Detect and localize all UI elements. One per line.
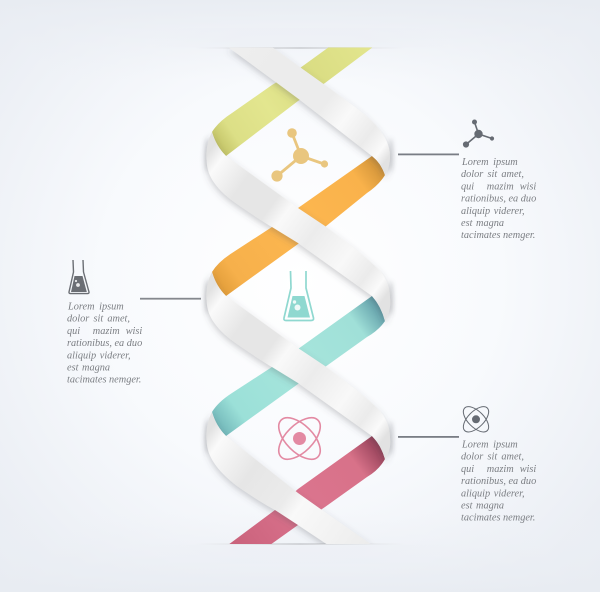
icon: grey molecule	[463, 120, 494, 148]
text block: bottom right: Lorem ipsum	[461, 440, 518, 450]
text block: bottom right: rationibus, ea duo	[461, 476, 536, 487]
bottom sheet	[150, 544, 450, 564]
text block: top right: aliquip viderer,	[461, 206, 525, 217]
bottom ledge shadow	[195, 543, 405, 545]
text block: top right: tacimates nemger.	[461, 230, 535, 241]
DNA helix	[205, 47, 393, 545]
white ribbon 2	[206, 132, 390, 321]
top ledge shadow	[195, 47, 405, 49]
ribbon: orange	[212, 156, 385, 296]
icon: grey flask	[69, 260, 89, 294]
text block: bottom right: dolor sit amet,	[461, 452, 524, 463]
white ribbon 3	[206, 272, 390, 459]
text block: top right: wisi	[520, 182, 536, 192]
text block: left: Lorem ipsum	[67, 302, 124, 312]
ribbon: red	[228, 436, 385, 545]
top fade	[0, 0, 600, 80]
text block: top right: Lorem ipsum	[461, 157, 518, 168]
white ribbon 1	[228, 47, 390, 175]
white ribbon 4	[206, 412, 372, 545]
text block: top right: est magna	[461, 218, 504, 229]
bottom fade	[0, 512, 600, 592]
text block: bottom right: qui	[461, 464, 474, 475]
text block: left: tacimates nemger.	[67, 375, 141, 386]
text block: bottom right	[461, 440, 536, 524]
connector: left	[140, 298, 201, 300]
text block: left: qui	[67, 326, 80, 337]
icon: pink atom	[272, 411, 327, 466]
text block: bottom right: wisi	[520, 464, 536, 475]
icon: teal flask	[284, 271, 314, 320]
text block: top right: rationibus, ea duo	[461, 194, 536, 205]
ribbon: yellow	[212, 47, 373, 156]
text block: bottom right: est magna	[461, 500, 504, 512]
text block: left	[67, 302, 142, 386]
text block: top right: qui	[461, 182, 474, 192]
text block: top right: dolor sit amet,	[461, 169, 524, 180]
text block: left: mazim	[93, 326, 120, 337]
text block: left: est magna	[67, 362, 110, 374]
connector: top right	[398, 154, 459, 155]
icon: grey atom	[459, 402, 493, 436]
ribbon: teal	[212, 296, 385, 436]
text block: top right: mazim	[487, 182, 514, 192]
top sheet	[150, 28, 450, 48]
text block: left: rationibus, ea duo	[67, 338, 142, 349]
text block: left: wisi	[126, 326, 142, 337]
text block: bottom right: aliquip viderer,	[461, 488, 525, 499]
text block: left: dolor sit amet,	[67, 314, 130, 325]
white ribbon soft halo	[205, 138, 393, 455]
text block: top right	[461, 157, 536, 241]
icon: gold molecule	[271, 128, 328, 182]
text block: bottom right: mazim	[487, 464, 514, 475]
text block: bottom right: tacimates nemger.	[461, 513, 535, 524]
text block: left: aliquip viderer,	[67, 350, 131, 361]
connector: bottom right	[398, 436, 459, 438]
